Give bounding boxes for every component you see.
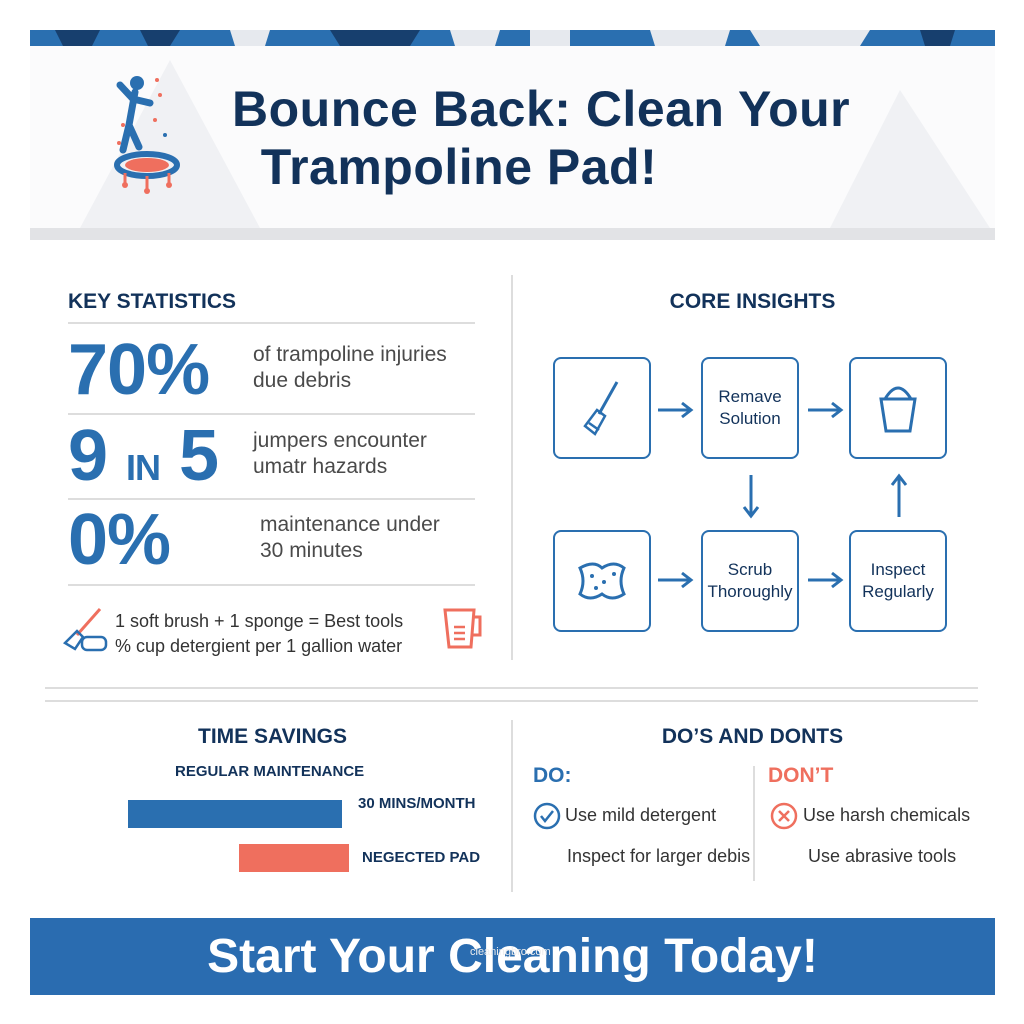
don't column: DON’T	[768, 764, 833, 787]
tools note	[63, 608, 482, 656]
icon box: sponge	[553, 530, 651, 632]
stat 1: of trampoline injuries	[253, 343, 447, 366]
label: neglected pad: NEGECTED PAD	[362, 849, 480, 866]
stat 3: 0%	[68, 500, 170, 580]
label: regular maintenance: REGULAR MAINTENANCE	[175, 763, 364, 780]
bar: regular maintenance	[128, 800, 342, 828]
tools note: % cup detergient per 1 gallion water	[115, 636, 402, 656]
panel: do's and don'ts	[533, 725, 970, 866]
stat 1	[68, 330, 447, 410]
footer banner	[30, 918, 995, 995]
title: Bounce Back: Clean Your	[232, 81, 850, 137]
step: inspect regularly	[849, 530, 947, 632]
don't column	[768, 764, 970, 866]
arrow down	[742, 475, 760, 518]
icon box: bucket	[849, 357, 947, 459]
heading: do's and donts: DO’S AND DONTS	[662, 725, 843, 748]
do column	[533, 764, 750, 866]
title	[232, 81, 850, 195]
footer banner: cleaningbro.com	[470, 946, 551, 958]
icon box: broom	[553, 357, 651, 459]
stat 2: jumpers encounter	[253, 429, 427, 452]
header banner	[30, 30, 995, 240]
heading: time savings: TIME SAVINGS	[198, 725, 347, 748]
stat 3: 30 minutes	[260, 539, 363, 562]
panel: time savings	[128, 725, 480, 872]
stat 3: maintenance under	[260, 513, 440, 536]
heading: key statistics: KEY STATISTICS	[68, 290, 236, 313]
stat 3	[68, 500, 440, 580]
arrow	[808, 572, 844, 588]
heading: core insights: CORE INSIGHTS	[670, 290, 835, 313]
do column: DO:	[533, 764, 572, 787]
arrow	[808, 402, 844, 418]
step: inspect regularly: Inspect	[871, 560, 925, 579]
panel: key statistics	[63, 290, 482, 656]
step: remove solution	[701, 357, 799, 459]
panel: core insights	[553, 290, 947, 632]
stat 1: 70%	[68, 330, 209, 410]
stat 2: umatr hazards	[253, 455, 387, 478]
do column: Use mild detergent	[565, 805, 716, 825]
stat 2	[68, 416, 427, 496]
step: inspect regularly: Regularly	[862, 582, 934, 601]
icon: trampoline jumper	[114, 76, 180, 194]
step: remove solution: Solution	[719, 409, 781, 428]
value: 30 mins/month: 30 MINS/MONTH	[358, 795, 476, 812]
tools note: 1 soft brush + 1 sponge = Best tools	[115, 611, 403, 631]
stat 2: 9 IN 5	[68, 416, 218, 496]
step: remove solution: Remave	[718, 387, 782, 406]
icon: brush and sponge	[63, 608, 108, 652]
icon: cross	[770, 802, 798, 830]
title: Trampoline Pad!	[261, 139, 657, 195]
icon: check	[534, 802, 560, 830]
do column: Inspect for larger debis	[567, 846, 750, 866]
step: scrub thoroughly: Scrub	[728, 560, 772, 579]
arrow	[658, 402, 694, 418]
icon: measuring cup	[443, 608, 482, 648]
don't column: Use harsh chemicals	[803, 805, 970, 825]
arrow up	[890, 474, 908, 517]
footer banner: Start Your Cleaning Today!	[207, 930, 818, 983]
stat 1: due debris	[253, 369, 351, 392]
arrow	[658, 572, 694, 588]
bar: neglected pad	[239, 844, 349, 872]
don't column: Use abrasive tools	[808, 846, 956, 866]
step: scrub thoroughly	[701, 530, 799, 632]
step: scrub thoroughly: Thoroughly	[707, 582, 793, 601]
